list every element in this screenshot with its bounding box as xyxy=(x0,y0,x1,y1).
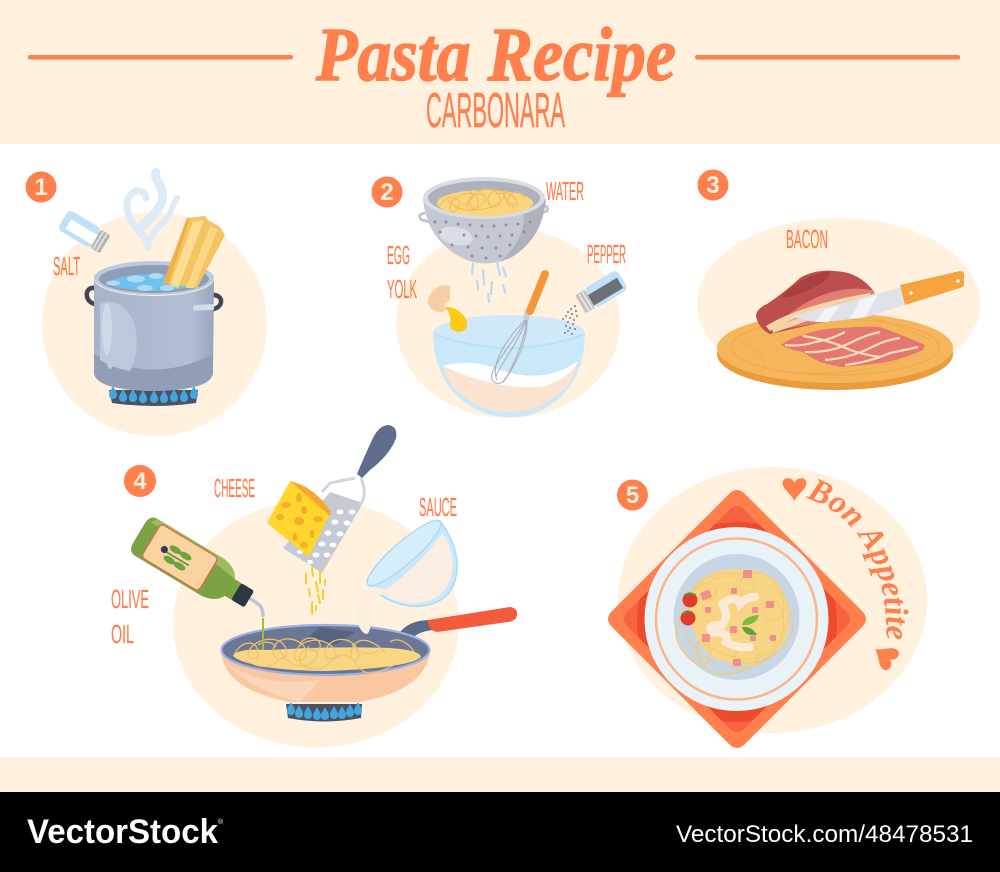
icon: napkin xyxy=(608,490,866,748)
icon: pepper shaker xyxy=(575,269,628,314)
backdrop circle xyxy=(396,228,620,418)
backdrop ellipse xyxy=(173,500,459,748)
footer: image id: VectorStock.com/48478531 xyxy=(676,821,973,848)
sauce drizzle xyxy=(722,597,755,604)
badge 2 xyxy=(372,176,402,208)
icon: gas burner xyxy=(109,386,198,406)
pepper grains xyxy=(562,305,578,335)
title: Pasta Recipe: Pasta Recipe xyxy=(315,13,676,97)
footer: brand text: VectorStock xyxy=(27,813,218,851)
backdrop ellipse xyxy=(618,467,927,733)
icon: whisk xyxy=(492,274,545,383)
pan pasta xyxy=(233,638,421,673)
icon: egg yolk xyxy=(445,307,467,332)
icon: pot body xyxy=(94,279,214,391)
icon: frying pan xyxy=(221,607,517,702)
header rule left xyxy=(28,55,293,60)
icon: oil pour over pasta xyxy=(262,618,264,650)
text: PEPPER xyxy=(587,239,626,269)
label: oil: OIL xyxy=(111,619,134,649)
badge 2: 2 xyxy=(380,179,394,206)
pasta on plate xyxy=(676,569,793,674)
footer: registered mark: ® xyxy=(218,818,224,826)
icon: steam xyxy=(127,172,177,247)
panel: step 1 boil pasta: SALT xyxy=(53,251,80,281)
icon: plate xyxy=(644,527,828,711)
icon: knife xyxy=(792,271,964,322)
panel: step 4 combine in pan: OLIVE xyxy=(111,584,149,614)
header band xyxy=(0,0,1000,144)
bacon bits xyxy=(700,570,776,666)
panel: step 2 sauce mix xyxy=(372,176,628,418)
icon: basil xyxy=(742,615,759,635)
panel: step 3 bacon xyxy=(697,170,980,390)
panel: step 3 bacon: BACON xyxy=(786,224,828,254)
icon: sauce bowl pouring xyxy=(357,513,480,634)
badge 1 xyxy=(26,172,56,202)
icon: colander xyxy=(420,177,548,264)
icon: gas burner xyxy=(286,702,362,722)
icon: cheese wedge xyxy=(267,481,331,557)
icon: spaghetti bundle xyxy=(163,216,225,288)
icon: tomatoes xyxy=(680,592,698,626)
header rule right xyxy=(695,55,960,60)
badge 5 xyxy=(617,480,648,510)
icon: bacon slab xyxy=(756,271,875,334)
badge 4: 4 xyxy=(133,468,147,495)
text: CARBONARA xyxy=(426,84,565,138)
badge 1: 1 xyxy=(34,174,48,201)
backdrop circle xyxy=(42,212,267,436)
heart top xyxy=(782,478,806,501)
badge 4 xyxy=(124,465,156,497)
sauce swirl xyxy=(710,604,750,647)
pasta in colander xyxy=(437,189,533,216)
panel: step 4 combine in pan: CHEESE xyxy=(214,473,255,503)
icon: salt shaker xyxy=(57,209,111,254)
badge 3 xyxy=(698,170,728,200)
icon: pot rim and water xyxy=(94,261,214,295)
icon: pot handles xyxy=(87,288,221,309)
panel: step 5 serve xyxy=(608,467,927,748)
water drops xyxy=(472,262,506,302)
icon: eggshell xyxy=(428,285,450,312)
panel: step 4 combine in pan: SAUCE xyxy=(419,492,457,522)
panel: step 2 sauce mix: WATER xyxy=(546,176,584,206)
icon: bacon slices xyxy=(781,327,925,367)
backdrop ellipse xyxy=(697,218,980,390)
badge 3: 3 xyxy=(706,172,720,199)
footer cream band xyxy=(0,757,1000,792)
panel: step 1 boil pasta xyxy=(26,172,267,436)
panel: step 4 combine in pan xyxy=(111,425,517,748)
icon: olive oil bottle xyxy=(128,514,263,618)
icon: cutting board xyxy=(717,313,953,390)
footer: black watermark bar xyxy=(0,792,1000,872)
badge 5: 5 xyxy=(626,482,639,509)
salt grains xyxy=(107,253,121,276)
icon: grater xyxy=(283,425,396,573)
cheese shreds xyxy=(306,568,325,614)
panel: step 2 sauce mix: EGG xyxy=(387,240,410,270)
heart bottom xyxy=(868,639,901,672)
panel: step 2 sauce mix: YOLK xyxy=(387,274,417,304)
lettering: Bon Appetite: Bon Appetite xyxy=(806,479,908,640)
icon: glass bowl xyxy=(433,315,585,417)
